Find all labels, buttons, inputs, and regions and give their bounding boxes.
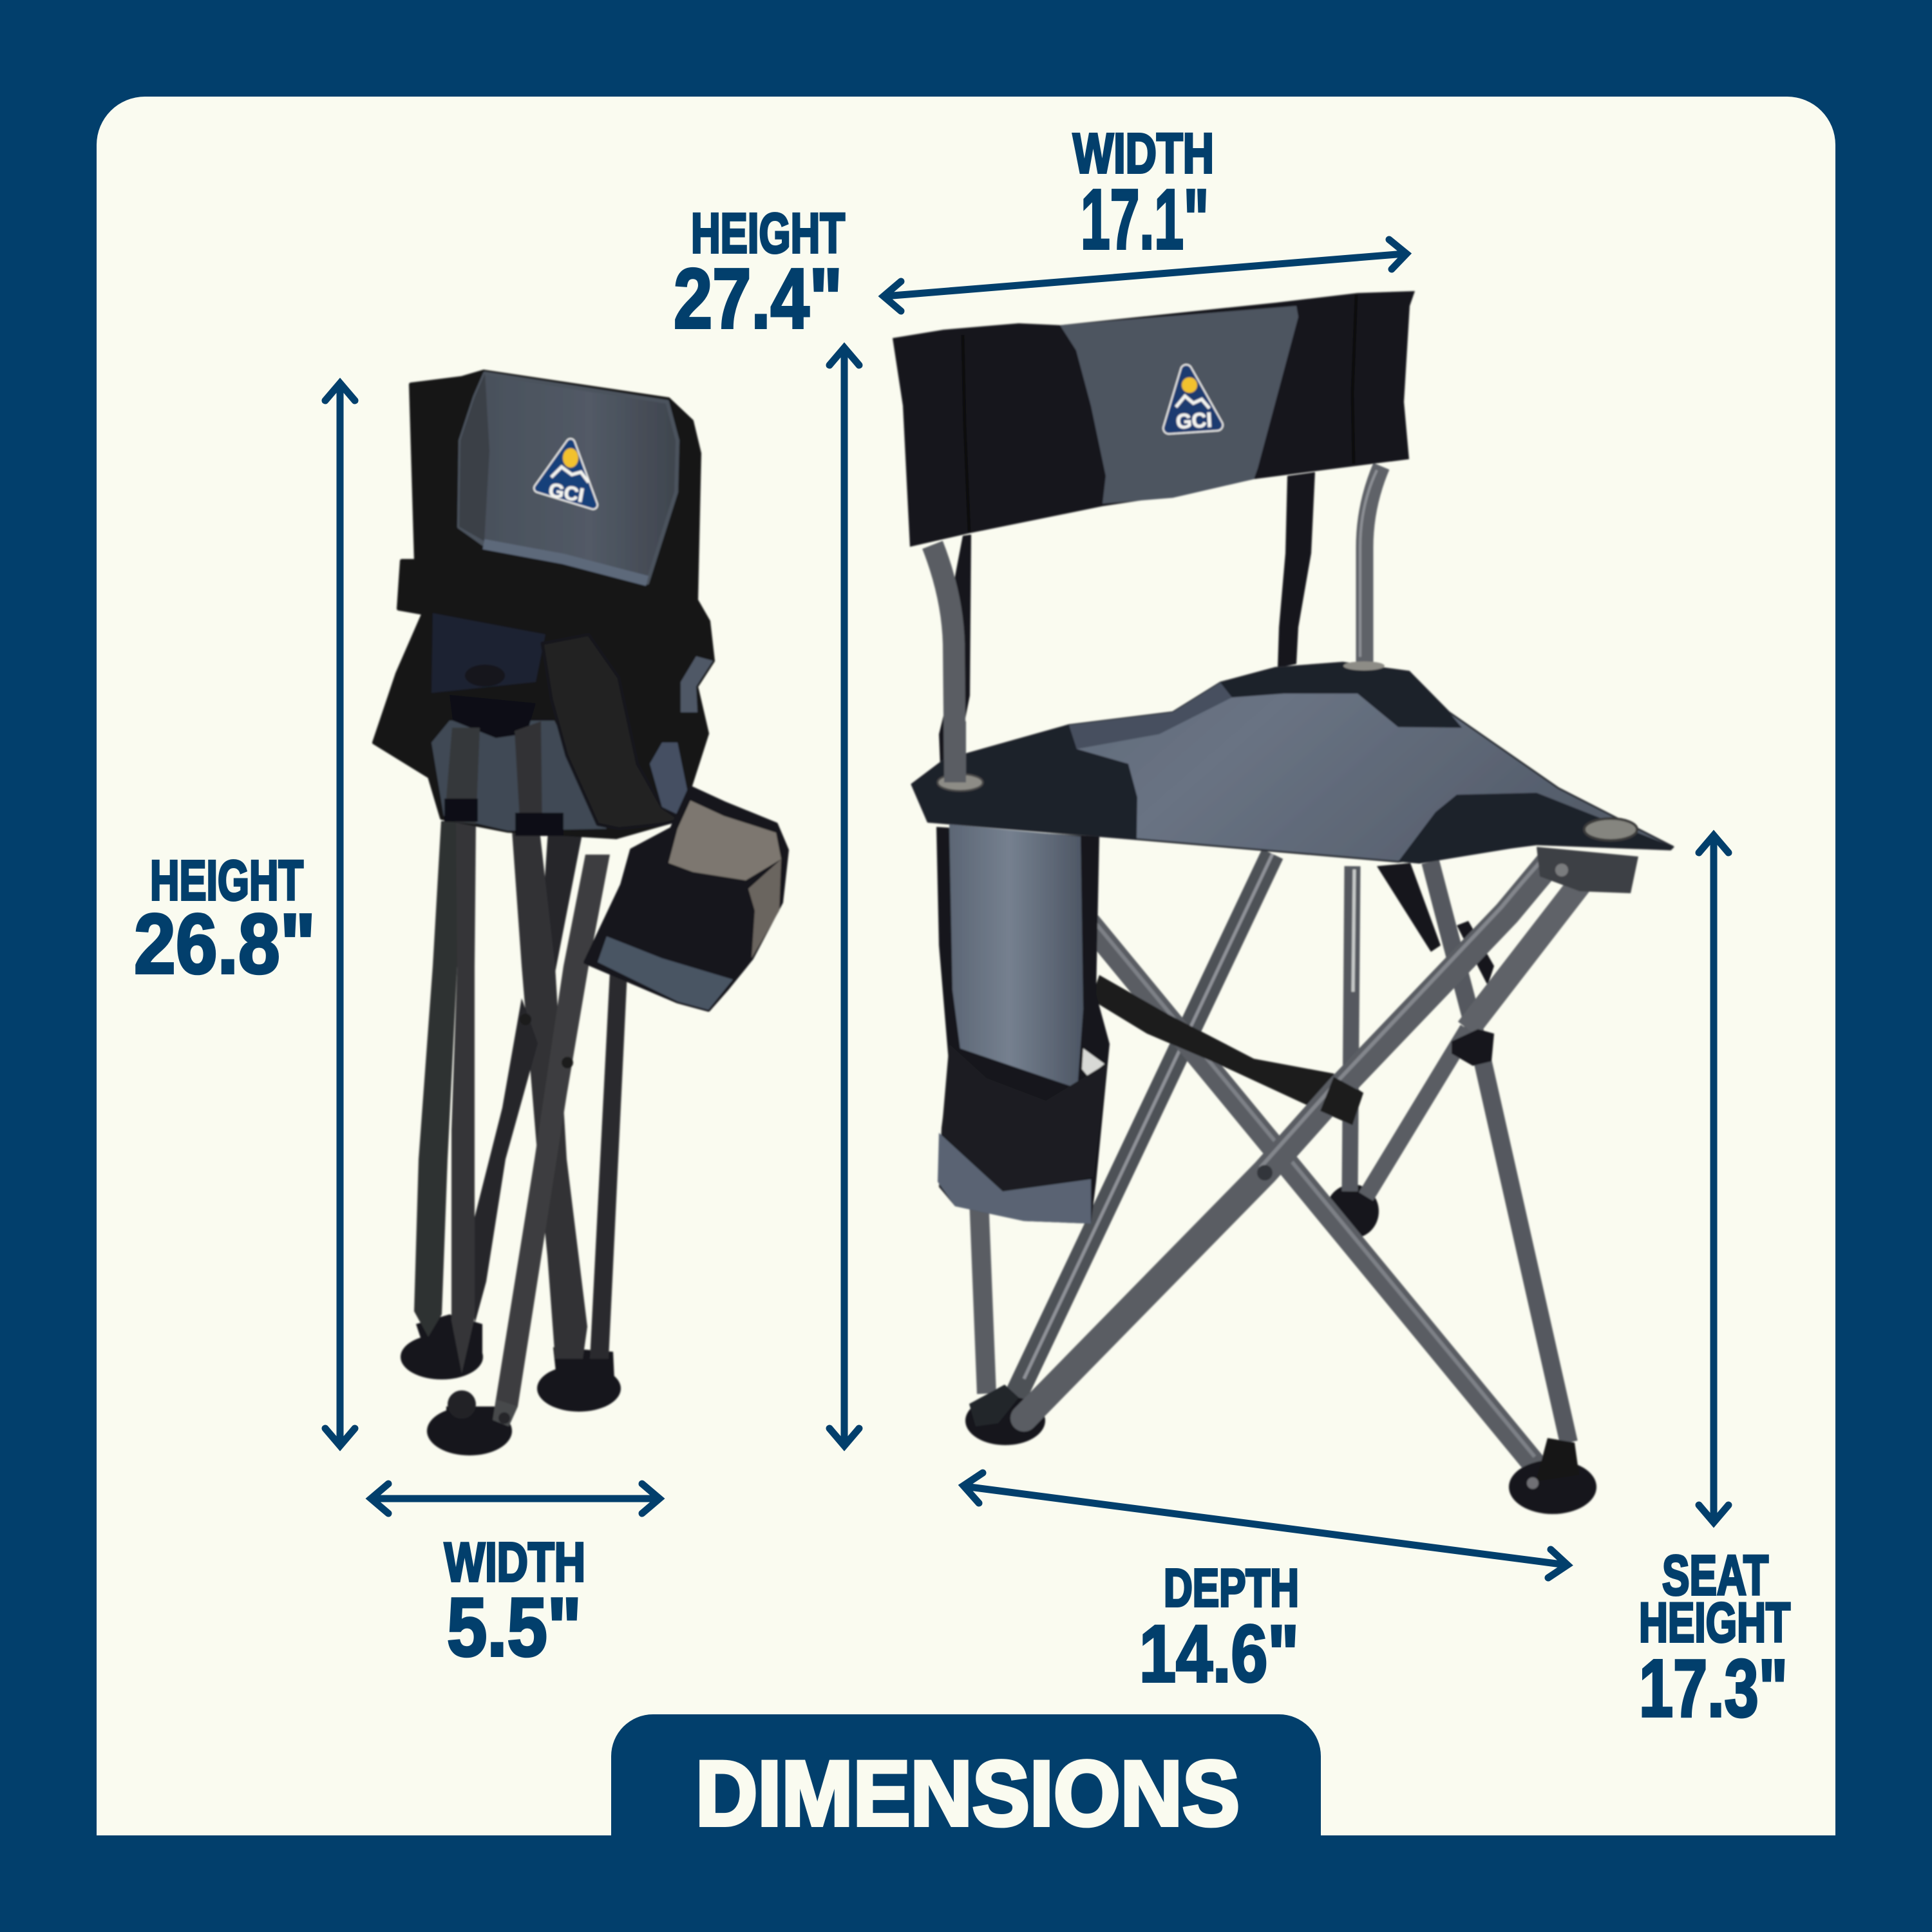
label: folded height: HEIGHT xyxy=(150,849,303,912)
backrest xyxy=(893,291,1415,547)
frame bracket xyxy=(444,665,564,836)
title tab xyxy=(611,1714,1321,1845)
folded headrest xyxy=(459,374,677,583)
back leg and foot xyxy=(1326,866,1379,1238)
label: folded height: 26.8" xyxy=(134,896,316,991)
label: folded height xyxy=(134,849,316,991)
folded chair xyxy=(374,372,787,1455)
folded chair feet xyxy=(401,1314,621,1412)
backrest tubes and straps xyxy=(933,466,1381,782)
pivot rivet xyxy=(1257,1165,1273,1180)
tube base at grommet xyxy=(944,721,966,782)
label: seat height xyxy=(1639,1544,1790,1734)
velcro strap xyxy=(542,634,681,829)
folded cup pocket xyxy=(585,788,787,1010)
long crossing leg xyxy=(1088,922,1540,1472)
arrow: depth xyxy=(963,1473,1567,1578)
folded chair legs xyxy=(414,821,628,1426)
corner bracket xyxy=(1537,847,1638,893)
arrow: open width xyxy=(884,240,1406,311)
arrow: folded width xyxy=(371,1484,659,1513)
rear black straps xyxy=(1377,863,1494,985)
gray side patches xyxy=(650,656,713,816)
double tube leg xyxy=(1014,854,1273,1399)
label: folded width: 5.5" xyxy=(447,1581,582,1674)
left front leg xyxy=(979,1198,987,1394)
seat xyxy=(912,663,1673,864)
open chair left foot xyxy=(965,1385,1045,1445)
grommets xyxy=(938,661,1637,840)
strap loop xyxy=(1320,1077,1363,1125)
label: open height: 27.4" xyxy=(674,251,842,346)
logo on backrest xyxy=(1169,370,1217,433)
title: DIMENSIONS xyxy=(696,1743,1240,1845)
label: open height xyxy=(674,202,845,346)
logo on folded chair: GCI xyxy=(547,480,585,507)
label: seat height: SEAT xyxy=(1662,1544,1768,1607)
side storage pocket xyxy=(936,824,1110,1224)
arrow: open height xyxy=(829,348,859,1446)
label: open width: WIDTH xyxy=(1073,122,1214,185)
label: depth: 14.6" xyxy=(1139,1609,1299,1699)
folded chair seat fabric xyxy=(431,721,607,831)
label: depth: DEPTH xyxy=(1164,1558,1299,1618)
open chair right foot xyxy=(1509,1438,1596,1514)
open chair xyxy=(893,291,1673,1514)
label: open height: HEIGHT xyxy=(691,202,845,265)
right brace tube xyxy=(1366,882,1581,1197)
arrow: folded height xyxy=(325,383,355,1446)
navy fold xyxy=(431,613,545,693)
cross strap xyxy=(1091,975,1363,1125)
logo on folded chair xyxy=(538,443,593,507)
label: folded width: WIDTH xyxy=(444,1532,585,1593)
label: open width: 17.1" xyxy=(1081,172,1209,267)
folded chair fabric body xyxy=(374,372,713,837)
logo on backrest: GCI xyxy=(1175,408,1213,433)
main front tube xyxy=(1024,860,1549,1418)
label: depth xyxy=(1139,1558,1299,1699)
label: seat height: HEIGHT xyxy=(1639,1592,1790,1654)
front right leg xyxy=(1430,862,1569,1443)
label: folded width xyxy=(444,1532,585,1674)
label: seat height: 17.3" xyxy=(1639,1643,1788,1734)
brace band xyxy=(1452,1029,1494,1066)
arrow: seat height xyxy=(1699,835,1728,1522)
folded chair front foot xyxy=(427,1390,518,1455)
label: open width xyxy=(1073,122,1214,267)
